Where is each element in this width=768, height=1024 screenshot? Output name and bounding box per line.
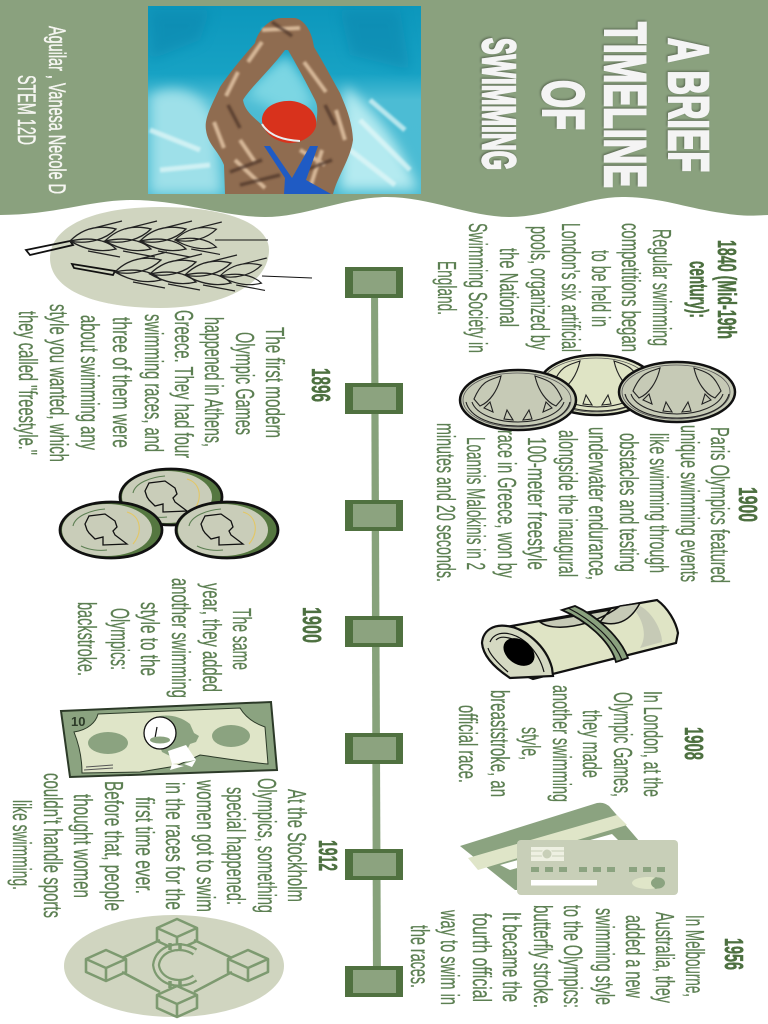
- entry: 1908 London: Olympic Games,: [608, 692, 638, 797]
- entry: 1840 mid-19th century: the National: [494, 248, 524, 327]
- entry: 1912 Stockholm: in the races for the: [160, 782, 190, 910]
- entry: 1908 London: official race.: [453, 705, 483, 783]
- entry: 1912 Stockholm: [7, 773, 343, 918]
- entry: 1840 mid-19th century: 1840 (Mid-19th: [712, 240, 742, 339]
- entry: 1900 Paris Olympics: alongside the inaugural: [553, 430, 583, 577]
- entry: 1956 Melbourne: 1956: [719, 938, 749, 970]
- entry: 1896 first modern Olympics: 1896: [306, 368, 336, 402]
- entry: 1900 backstroke: year, they added: [197, 583, 227, 692]
- entry: 1912 Stockholm: special happened:: [221, 787, 251, 905]
- entry: 1896 first modern Olympics: about swimming any: [75, 315, 105, 450]
- illustration: three portrait coins: [60, 469, 278, 558]
- author credit: Aguilar , Vanesa Necole D: [43, 26, 70, 194]
- entry: 1912 Stockholm: women got to swim: [191, 779, 221, 912]
- entry: 1900 Paris Olympics: like swimming through: [644, 433, 674, 573]
- illustration: ten-dollar bill: [61, 702, 277, 777]
- entry: 1908 London: 1908: [679, 727, 709, 760]
- illustration: wheat stalks on oval: [26, 207, 312, 308]
- entry: 1896 first modern Olympics: Greece. They had four: [169, 310, 199, 458]
- entry: 1908 London: style,: [516, 727, 546, 760]
- entry: 1900 Paris Olympics: [431, 423, 763, 583]
- entry: 1896 first modern Olympics: [13, 304, 336, 462]
- entry: 1912 Stockholm: thought women: [68, 794, 98, 898]
- entry: 1900 Paris Olympics: Loannis Malokinis in 2: [461, 437, 491, 570]
- entry: 1912 Stockholm: Before that, people: [99, 781, 129, 911]
- entry: 1908 London: another swimming: [547, 685, 577, 802]
- entry: 1896 first modern Olympics: three of them were: [107, 317, 137, 448]
- entry: 1900 Paris Olympics: 100-meter freestyle: [522, 437, 552, 570]
- entry: 1840 mid-19th century: to be held in: [586, 250, 616, 327]
- entry: 1840 mid-19th century: Regular swimming: [647, 229, 677, 346]
- entry: 1956 Melbourne: [405, 905, 749, 1008]
- illustration: laurel medals: [460, 355, 735, 430]
- entry: 1840 mid-19th century: [432, 223, 742, 353]
- author credit: [12, 26, 70, 194]
- entry: 1900 Paris Olympics: unique swimming events: [675, 425, 705, 582]
- entry: 1896 first modern Olympics: they called "freestyle.": [13, 311, 43, 455]
- entry: 1840 mid-19th century: London's six artificial: [556, 223, 586, 352]
- entry: 1840 mid-19th century: century):: [684, 261, 714, 318]
- timeline with seven markers: [345, 267, 403, 997]
- entry: 1912 Stockholm: 1912: [313, 840, 343, 871]
- entry: 1900 Paris Olympics: race in Greece, won by: [492, 430, 522, 578]
- entry: 1912 Stockholm: At the Stockholm: [282, 789, 312, 902]
- title: TIMELINE: [592, 22, 657, 188]
- entry: 1900 Paris Olympics: Paris Olympics featured: [705, 427, 735, 583]
- header band: [0, 0, 768, 217]
- entry: 1900 Paris Olympics: minutes and 20 seconds.: [431, 423, 461, 582]
- title: OF: [530, 80, 595, 130]
- entry: 1900 backstroke: 1900: [297, 607, 327, 643]
- entry: 1912 Stockholm: first time ever.: [130, 797, 160, 894]
- illustration: connected cubes on oval: [64, 915, 284, 1017]
- title: [473, 22, 720, 188]
- entry: 1912 Stockholm: like swimming.: [7, 800, 37, 890]
- entry: 1908 London: breaststroke, an: [485, 690, 515, 797]
- entry: 1896 first modern Olympics: style you wanted, which: [44, 304, 74, 462]
- entry: 1900 backstroke: [72, 578, 327, 698]
- illustration: rolled banknotes: [482, 600, 678, 679]
- bill denomination: 10: [71, 714, 85, 729]
- entry: 1840 mid-19th century: Swimming Society in: [463, 223, 493, 353]
- entry: 1908 London: [453, 685, 709, 802]
- entry: 1840 mid-19th century: competitions began: [616, 223, 646, 352]
- entry: 1912 Stockholm: Olympics, something: [252, 778, 282, 913]
- author credit: STEM 12D: [12, 75, 40, 145]
- portrait on bill: [144, 715, 199, 770]
- entry: 1840 mid-19th century: England.: [432, 261, 462, 315]
- entry: 1900 backstroke: backstroke.: [72, 602, 102, 676]
- illustration: credit cards: [460, 803, 678, 895]
- entry: 1900 Paris Olympics: underwater endurance,: [583, 427, 613, 580]
- entry: 1896 first modern Olympics: The first modern: [260, 327, 290, 438]
- entry: 1896 first modern Olympics: Olympic Games: [230, 332, 260, 435]
- entry: 1896 first modern Olympics: swimming races, and: [139, 314, 169, 452]
- entry: 1908 London: they made: [577, 710, 607, 778]
- entry: 1908 London: In London, at the: [638, 691, 668, 797]
- entry: 1900 backstroke: another swimming: [166, 578, 196, 698]
- entry: 1900 Paris Olympics: obstacles and testing: [614, 433, 644, 572]
- title: A BRIEF: [656, 38, 720, 172]
- entry: 1900 backstroke: Olympics:: [105, 608, 135, 670]
- entry: 1896 first modern Olympics: happened in Athens,: [199, 317, 229, 447]
- swimsuit: [264, 146, 331, 194]
- entry: 1900 backstroke: style to the: [135, 602, 165, 676]
- entry: 1840 mid-19th century: pools, organized by: [525, 226, 555, 350]
- title: SWIMMING: [473, 38, 525, 170]
- entry: 1912 Stockholm: couldn't handle sports: [38, 773, 68, 918]
- photo: swimmer in pool: [148, 6, 421, 194]
- arms and torso: [206, 18, 353, 194]
- swim cap: [262, 101, 316, 143]
- entry: 1900 Paris Olympics: 1900: [733, 487, 763, 522]
- entry: 1900 backstroke: The same: [227, 608, 257, 670]
